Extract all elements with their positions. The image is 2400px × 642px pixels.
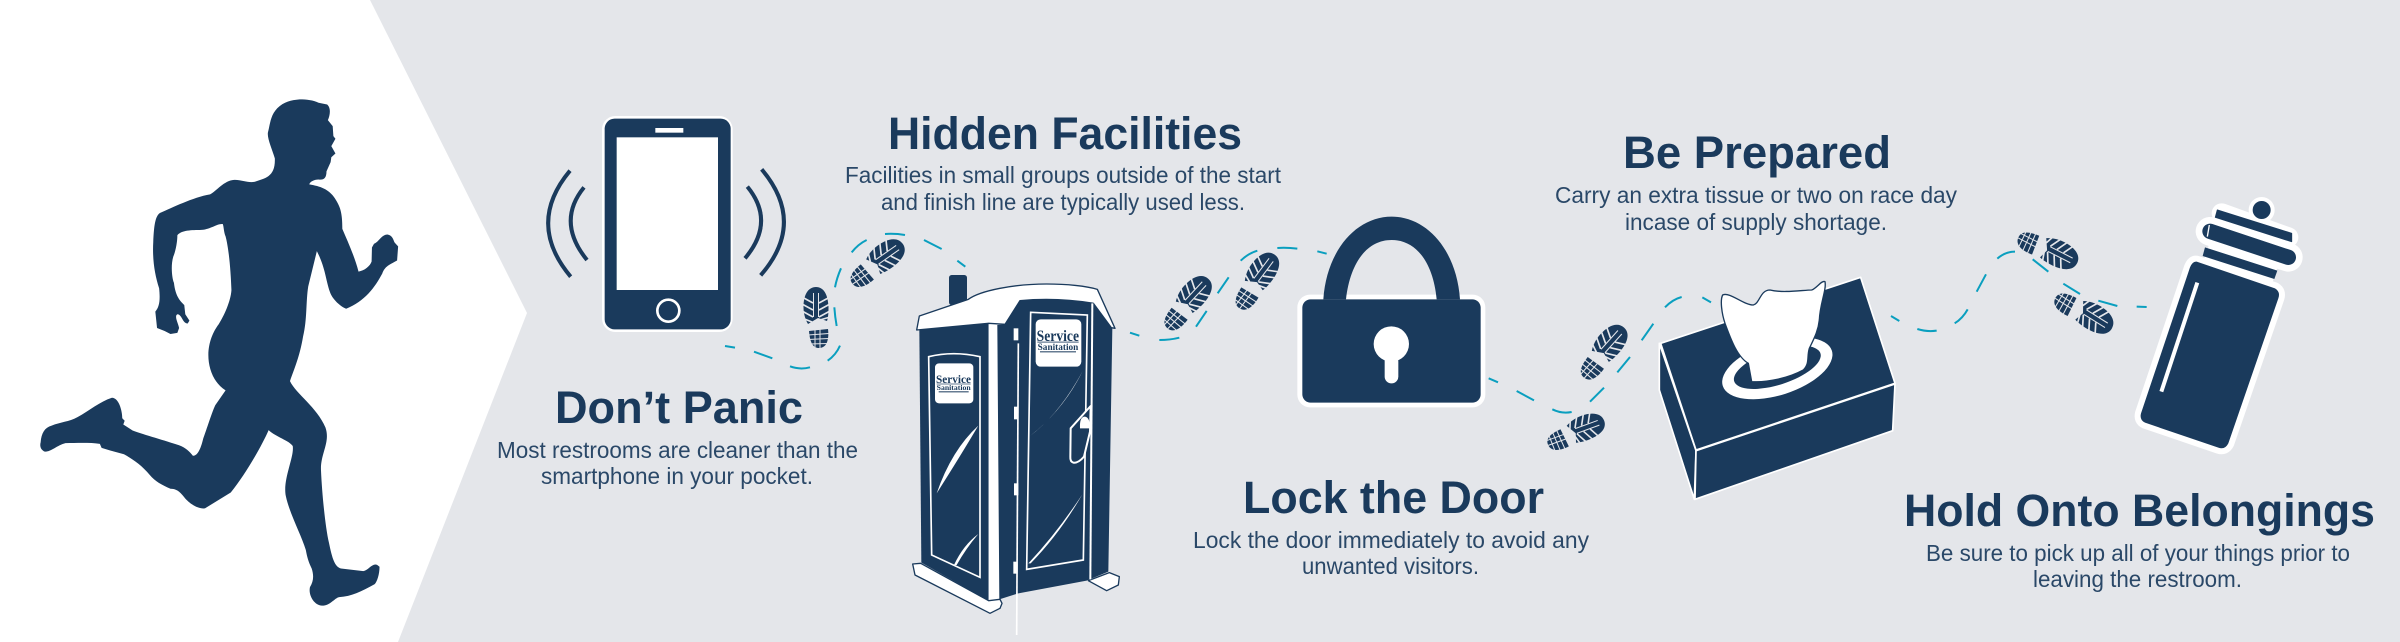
text block: Hold Onto Belongings: leaving the restroom. <box>2033 566 2242 592</box>
footprint <box>1570 318 1635 385</box>
text block: Hold Onto Belongings: Hold Onto Belongings <box>1904 485 2375 536</box>
footprint <box>1154 269 1219 336</box>
icon: running man silhouette <box>40 99 398 606</box>
text block: Hidden Facilities: Facilities in small groups outside of the start <box>845 162 1281 188</box>
text block: Hidden Facilities: Hidden Facilities <box>888 108 1242 159</box>
icon: portable toilet: Service <box>936 372 972 386</box>
icon: portable toilet <box>913 275 1119 635</box>
footprint <box>842 232 911 293</box>
text block: Be Prepared: Carry an extra tissue or two on race day <box>1555 182 1957 208</box>
icon: portable toilet: Sanitation <box>1038 343 1079 353</box>
footprint <box>2013 221 2084 276</box>
text block: Hold Onto Belongings: Be sure to pick up all of your things prior to <box>1926 540 2350 566</box>
footprint <box>1225 246 1287 315</box>
text block: Hidden Facilities <box>845 108 1281 215</box>
icon: padlock <box>1297 217 1485 407</box>
icon: vibrating smartphone <box>548 116 784 332</box>
white chevron background <box>0 0 527 642</box>
dashed path: phone to toilet <box>725 234 965 368</box>
text block: Don't Panic: Most restrooms are cleaner than the <box>497 437 858 463</box>
text block: Lock the Door <box>1193 472 1589 579</box>
dashed path: toilet to lock <box>1130 248 1327 340</box>
text block: Hidden Facilities: and finish line are typically used less. <box>881 189 1245 215</box>
text block: Lock the Door: Lock the door immediately to avoid any <box>1193 527 1589 553</box>
icon: water bottle <box>2141 197 2292 448</box>
text block: Be Prepared: incase of supply shortage. <box>1625 209 1887 235</box>
icon: portable toilet: Service <box>1037 328 1079 345</box>
dashed path: approach to tissue box <box>1590 297 1711 402</box>
footprint <box>802 287 830 348</box>
text block: Be Prepared: Be Prepared <box>1623 127 1891 178</box>
text block: Don't Panic: Don’t Panic <box>555 382 803 433</box>
text block: Lock the Door: unwanted visitors. <box>1302 553 1479 579</box>
text block: Don't Panic: smartphone in your pocket. <box>541 463 813 489</box>
text block: Be Prepared <box>1555 127 1957 235</box>
text block: Lock the Door: Lock the Door <box>1243 472 1544 523</box>
footprint <box>1542 408 1609 455</box>
text block: Hold Onto Belongings <box>1904 485 2375 592</box>
text block: Don't Panic <box>497 382 858 489</box>
dashed path: lock to tissue box <box>1489 378 1572 413</box>
icon: tissue box <box>1659 277 1895 499</box>
icon: portable toilet: Sanitation <box>937 383 971 392</box>
footprint <box>2050 282 2120 341</box>
dashed path: tissue box to bottle <box>1891 252 2147 331</box>
